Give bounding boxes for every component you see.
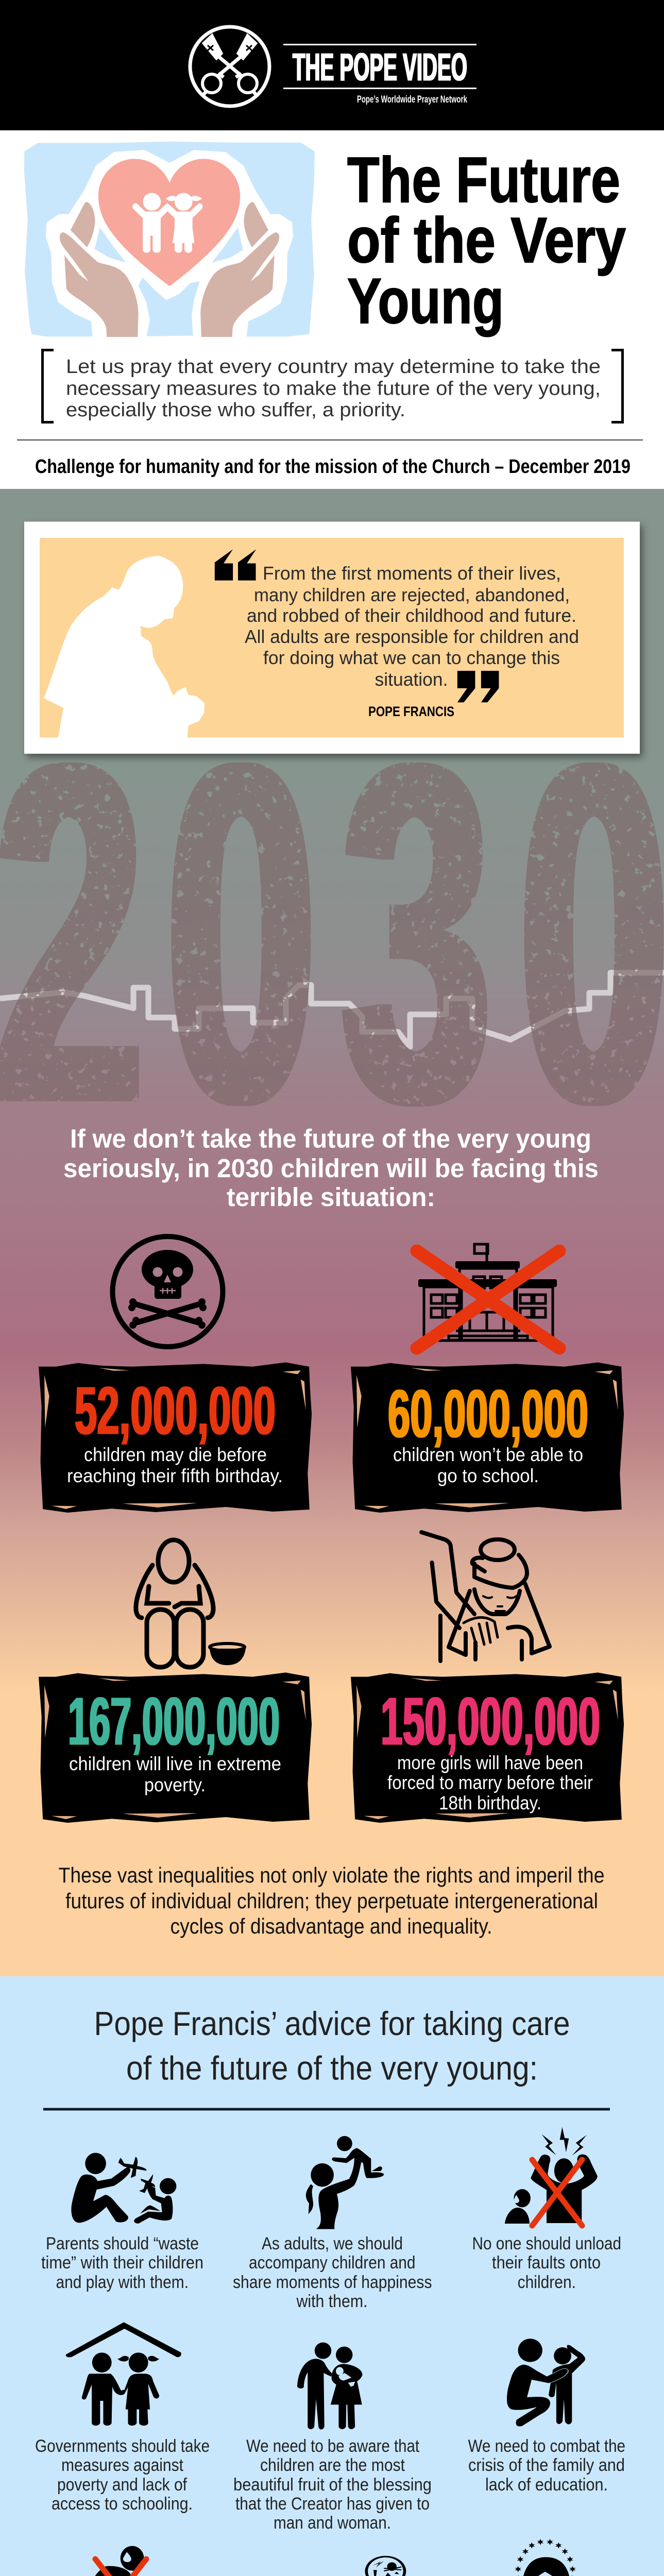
description: 18th birthday. <box>439 1792 541 1814</box>
icon: angry adult and crying child <box>505 2127 598 2224</box>
caption: As adults, we should <box>262 2234 403 2253</box>
caption: measures against <box>61 2455 183 2475</box>
caption: their faults onto <box>492 2253 601 2273</box>
prayer text: necessary measures to make the future of the very young, <box>66 378 601 400</box>
description: poverty. <box>144 1774 206 1795</box>
caption: children. <box>518 2273 576 2292</box>
right bracket <box>611 350 622 422</box>
logo rule top <box>283 44 476 45</box>
caption: with them. <box>296 2292 368 2311</box>
caption: accompany children and <box>249 2253 415 2273</box>
left hand <box>60 202 139 337</box>
icon: child in poverty with bowl <box>136 1540 246 1667</box>
caption: crisis of the family and <box>468 2455 625 2475</box>
advice: no child labor <box>42 2546 202 2576</box>
advice: children as fruit of blessing <box>233 2343 432 2533</box>
heading: advice: of the future of the very young: <box>126 2049 538 2087</box>
card inner panel <box>40 538 624 738</box>
illustration: hands holding heart with children <box>24 142 315 337</box>
title <box>347 145 626 337</box>
panel: stat 150,000,000 <box>351 1672 624 1823</box>
panel: stat 167,000,000 <box>39 1672 312 1823</box>
icon: adult lifting child <box>306 2136 384 2229</box>
heading: 2030 situation <box>63 1124 599 1212</box>
torn black box <box>351 1672 624 1823</box>
panel: stat 52,000,000 <box>39 1362 312 1513</box>
red cross <box>532 2160 582 2226</box>
advice: do not unload faults <box>472 2127 621 2292</box>
school building <box>424 1243 553 1341</box>
heading: 2030 situation: seriously, in 2030 children will be facing this <box>63 1154 599 1183</box>
caption <box>233 2234 432 2311</box>
heading: advice <box>94 2005 570 2087</box>
closing statement <box>59 1863 605 1938</box>
icon: adult comforting child <box>506 2338 585 2427</box>
description: more girls will have been <box>397 1752 583 1773</box>
title: Young <box>347 266 504 337</box>
big grunge year 2030: 0 <box>520 663 664 1204</box>
quote text: many children are rejected, abandoned, <box>254 584 570 605</box>
quote attribution: POPE FRANCIS <box>368 704 454 719</box>
caption <box>468 2436 625 2495</box>
right hand <box>200 202 279 337</box>
caption: man and woman. <box>274 2513 391 2533</box>
caption: time” with their children <box>41 2253 203 2273</box>
red cross <box>417 1251 559 1348</box>
caption: lack of education. <box>485 2475 608 2495</box>
icon: skull and crossbones <box>112 1236 223 1347</box>
caption: that the Creator has given to <box>235 2494 430 2514</box>
icon: crossed keys logo <box>190 27 269 106</box>
torn black box <box>351 1362 624 1513</box>
advice: crisis of family and education <box>468 2338 625 2495</box>
icon: praying pope silhouette <box>44 556 205 738</box>
closing statement: futures of individual children; they perpetuate intergenerational <box>65 1889 598 1913</box>
description: forced to marry before their <box>387 1772 593 1793</box>
caption: and play with them. <box>56 2273 189 2292</box>
number: 167,000,000 <box>68 1683 280 1759</box>
advice: maternity of the Church <box>461 2539 633 2576</box>
caption: share moments of happiness <box>233 2273 432 2292</box>
heading: advice: Pope Francis’ advice for taking care <box>94 2005 570 2042</box>
logo tagline: Pope’s Worldwide Prayer Network <box>357 94 467 105</box>
closing statement: cycles of disadvantage and inequality. <box>170 1914 492 1938</box>
icon: crossed-out school <box>417 1243 559 1348</box>
description: children may die before <box>84 1444 267 1465</box>
caption: beautiful fruit of the blessing <box>233 2475 432 2495</box>
big grunge year 2030: 3 <box>342 663 491 1204</box>
caption: access to schooling. <box>52 2494 193 2514</box>
caption <box>233 2436 432 2533</box>
caption: children are the most <box>260 2455 405 2475</box>
heading: 2030 situation: terrible situation: <box>227 1182 435 1212</box>
heart <box>98 159 240 286</box>
logo wordmark: THE POPE VIDEO <box>293 45 467 89</box>
caption: No one should unload <box>472 2234 621 2253</box>
panel: Pope Francis quote card <box>24 521 640 754</box>
torn black box <box>39 1672 312 1823</box>
title: of the Very <box>347 205 626 276</box>
icon: children under a roof <box>66 2322 181 2426</box>
quote text <box>245 563 579 690</box>
children <box>132 193 202 253</box>
description: children will live in extreme <box>69 1753 281 1774</box>
advice: accompany children <box>233 2136 432 2311</box>
icon: closing quote mark <box>457 671 499 702</box>
icon: child digging with shovel <box>93 2546 161 2576</box>
caption: We need to be aware that <box>246 2436 419 2456</box>
left bracket <box>42 350 54 422</box>
description <box>387 1752 593 1814</box>
caption <box>41 2234 203 2292</box>
icon: opening quote mark <box>215 549 256 581</box>
red cross <box>95 2559 146 2576</box>
quote text: for doing what we can to change this <box>263 647 560 668</box>
big grunge year 2030: 0 <box>167 663 316 1204</box>
description <box>393 1444 583 1486</box>
description: reaching their fifth birthday. <box>67 1465 283 1486</box>
quote text: All adults are responsible for children and <box>245 626 579 647</box>
description <box>69 1753 281 1795</box>
caption: Governments should take <box>35 2436 210 2456</box>
big grunge year 2030 <box>0 663 664 1204</box>
number: 52,000,000 <box>75 1372 276 1448</box>
card frame <box>24 521 640 754</box>
prayer text: Let us pray that every country may determine to take the <box>66 356 601 378</box>
skyline line <box>0 973 664 1047</box>
caption: We need to combat the <box>468 2436 625 2456</box>
logo rule bottom <box>283 88 476 89</box>
quote text: From the first moments of their lives, <box>263 563 561 584</box>
icon: parent and child with planes <box>71 2153 176 2224</box>
heading: 2030 situation: If we don’t take the future of the very young <box>70 1124 591 1153</box>
description: go to school. <box>437 1465 539 1486</box>
prayer intention in brackets <box>42 350 622 422</box>
caption <box>35 2436 210 2514</box>
advice: do not absorb violence <box>240 2556 424 2576</box>
torn black box <box>39 1362 312 1513</box>
advice: play with children <box>41 2153 203 2292</box>
caption: poverty and lack of <box>57 2475 187 2495</box>
quote text: and robbed of their childhood and future. <box>247 605 576 626</box>
advice: governments <box>35 2322 210 2514</box>
quote text: situation. <box>375 669 448 690</box>
panel: stat 60,000,000 <box>351 1362 624 1513</box>
icon: children watching violent screen <box>273 2556 405 2576</box>
caption <box>472 2234 621 2292</box>
prayer text <box>66 356 601 421</box>
prayer text: especially those who suffer, a priority. <box>66 399 405 421</box>
icon: Mary with child and stars <box>512 2539 581 2576</box>
header band <box>0 0 664 130</box>
icon: couple with baby <box>297 2343 362 2430</box>
icon: child bride <box>421 1532 550 1661</box>
caption: Parents should “waste <box>46 2234 199 2253</box>
description <box>67 1444 283 1486</box>
description: children won’t be able to <box>393 1444 583 1465</box>
closing statement: These vast inequalities not only violate the rights and imperil the <box>59 1863 605 1887</box>
